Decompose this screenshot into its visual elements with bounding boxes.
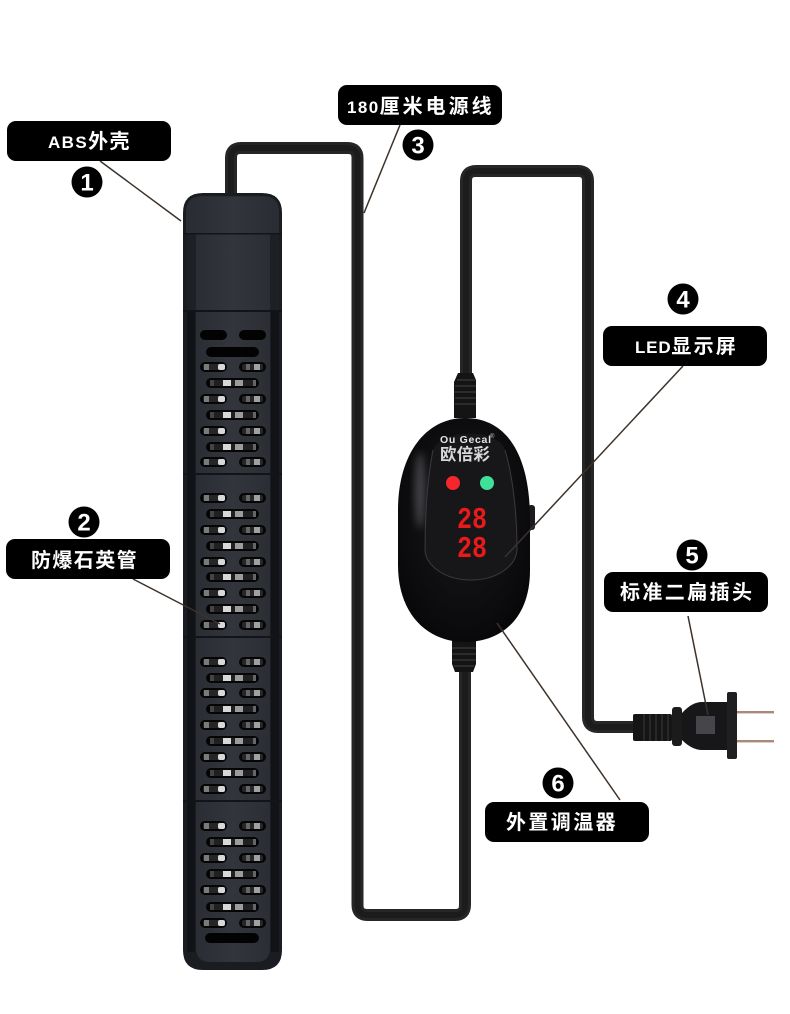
- plug: [633, 692, 774, 759]
- label 3: 180厘米电源线: [347, 95, 495, 118]
- number badge 2: [68, 506, 100, 538]
- heater vent slots, section 1: [200, 330, 266, 467]
- leader line 5: [688, 616, 708, 715]
- power cable: heater to thermostat: [231, 148, 465, 915]
- heater center plate: [196, 312, 270, 962]
- leader line 3: [364, 125, 400, 213]
- callout 4: LED display: [505, 284, 767, 557]
- leader line 2: [133, 579, 220, 624]
- number badge 1: [72, 166, 102, 198]
- brand logo: ®: [490, 433, 495, 440]
- heater vent slots, section 2: [200, 493, 266, 630]
- display panel edge: [425, 450, 517, 580]
- callout 2: quartz tube: [6, 506, 220, 624]
- brand logo: Ou Gecal: [440, 434, 492, 446]
- label 3: [338, 85, 502, 125]
- callout 6: external thermostat: [485, 623, 649, 842]
- label 4: LED显示屏: [635, 336, 738, 358]
- plug body: [682, 702, 728, 750]
- number badge 6: 6: [551, 770, 565, 798]
- number badge 3: [402, 130, 434, 160]
- upper strain relief: [454, 373, 476, 418]
- heater vent slots, section 3: [200, 657, 266, 794]
- thermostat controller: [398, 418, 535, 642]
- red indicator light: [446, 476, 460, 490]
- LED reading bottom: 28: [457, 532, 487, 567]
- label 5: [604, 572, 768, 612]
- plug strain relief: [633, 714, 672, 741]
- plug grip patch: [696, 716, 715, 734]
- controller body: [398, 418, 530, 642]
- leader line 1: [100, 161, 181, 221]
- heater cap: [186, 196, 279, 233]
- side button: [528, 505, 535, 530]
- plug collar: [672, 707, 682, 746]
- number badge 2: 2: [77, 510, 91, 536]
- power cable: thermostat to plug: [466, 171, 640, 727]
- heater side strips: [187, 312, 279, 952]
- heater section seams: [183, 233, 282, 802]
- number badge 6: [542, 768, 574, 798]
- heater vent slots, section 4: [200, 821, 266, 943]
- label 1: ABS外壳: [48, 130, 131, 153]
- label 1: [7, 121, 171, 161]
- label 6: [485, 802, 649, 842]
- brand logo: 欧倍彩: [440, 444, 490, 464]
- number badge 4: 4: [676, 286, 690, 314]
- plug prongs: [735, 711, 774, 742]
- lower strain relief: [452, 640, 476, 672]
- LED reading top: 28: [457, 503, 487, 538]
- leader line 6: [497, 623, 620, 800]
- heater body: [183, 193, 282, 970]
- number badge 1: 1: [80, 170, 94, 196]
- body highlight: [415, 452, 425, 528]
- callout 3: power cord: [338, 85, 502, 213]
- number badge 4: [668, 284, 698, 314]
- heater shell: [183, 193, 282, 970]
- label 2: 防爆石英管: [31, 549, 138, 572]
- callout 1: ABS shell: [7, 121, 181, 221]
- display panel: [425, 434, 517, 580]
- green indicator light: [480, 476, 494, 490]
- leader line 4: [505, 366, 683, 557]
- callout 5: standard plug: [604, 540, 768, 715]
- label 4: [603, 326, 767, 366]
- number badge 3: 3: [411, 132, 425, 160]
- number badge 5: [676, 540, 708, 570]
- label 2: [6, 539, 170, 579]
- number badge 5: 5: [685, 542, 699, 570]
- brand logo: [440, 433, 495, 464]
- label 6: 外置调温器: [506, 811, 618, 834]
- plug flange: [727, 692, 737, 759]
- label 5: 标准二扁插头: [620, 581, 754, 604]
- heater upper collar: [187, 233, 279, 311]
